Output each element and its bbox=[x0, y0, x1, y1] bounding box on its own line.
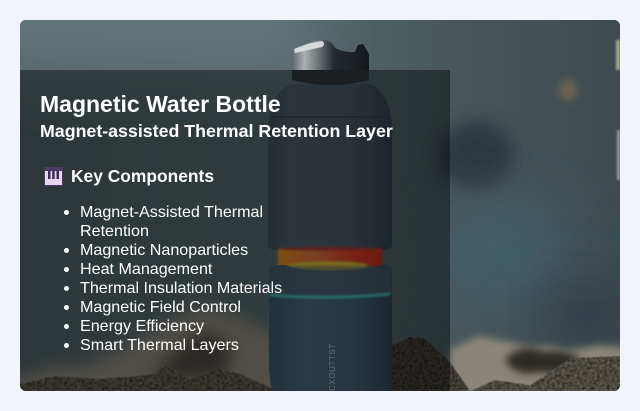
component list: Heat Management bbox=[80, 260, 212, 278]
component list: Magnet-Assisted Thermal Retention bbox=[80, 203, 263, 240]
bottle bbox=[268, 39, 392, 391]
translucent text overlay panel bbox=[20, 70, 450, 391]
heated core band bbox=[278, 247, 382, 270]
icon: piano keys bbox=[44, 167, 63, 186]
component list: Thermal Insulation Materials bbox=[80, 279, 282, 297]
bottle cap bbox=[292, 39, 369, 85]
section heading: key components: Key Components bbox=[71, 166, 214, 186]
bottle vertical brand text: CXOUTTST bbox=[328, 343, 337, 391]
component list: Magnetic Field Control bbox=[80, 298, 241, 316]
title: Magnetic Water Bottle bbox=[40, 91, 281, 117]
bottle body lower bbox=[269, 265, 392, 391]
component list bbox=[64, 203, 282, 354]
blurred rocks bbox=[0, 306, 630, 400]
shoulder seam bbox=[270, 116, 389, 118]
teal light ring bbox=[270, 294, 390, 297]
cap lower dark band bbox=[292, 70, 369, 85]
subtitle: Magnet-assisted Thermal Retention Layer bbox=[40, 121, 393, 141]
component list: Magnetic Nanoparticles bbox=[80, 241, 248, 259]
component list: Energy Efficiency bbox=[80, 317, 204, 335]
component list: Smart Thermal Layers bbox=[80, 336, 239, 354]
foreground rocks bbox=[20, 337, 620, 391]
bottle body upper bbox=[268, 84, 392, 250]
